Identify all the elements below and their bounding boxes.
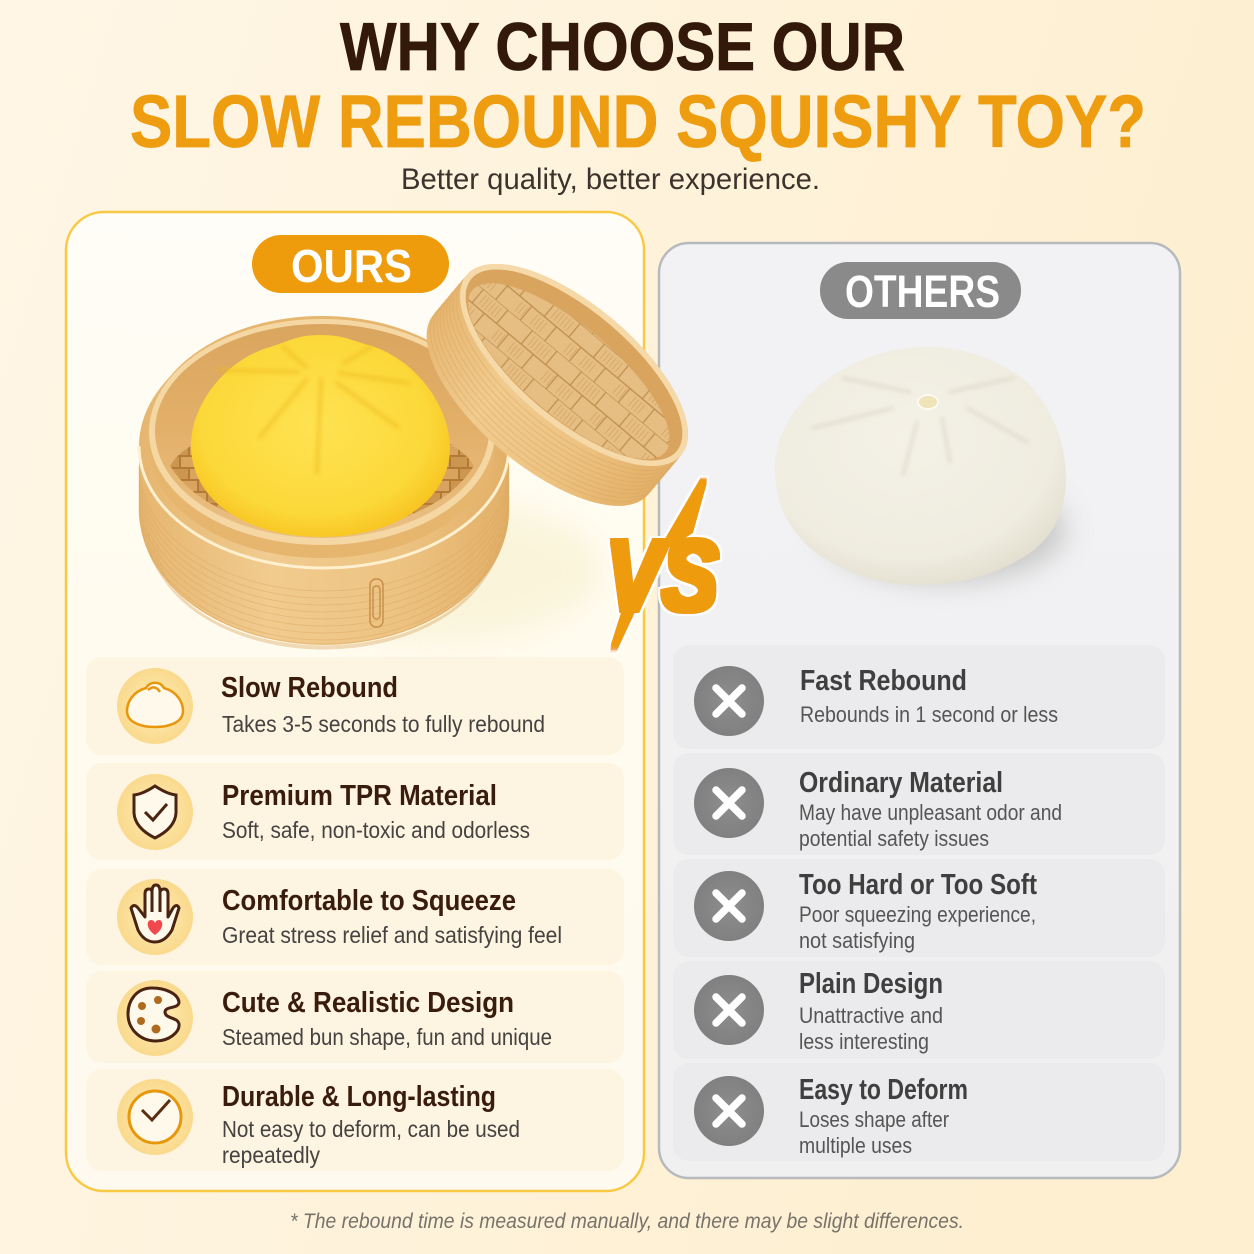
other row: plain design: Unattractive and (799, 1003, 943, 1028)
other row: ordinary material: potential safety issues (799, 826, 989, 851)
other row: ordinary material: May have unpleasant odor and (799, 800, 1062, 825)
feature row: design: Steamed bun shape, fun and unique (222, 1024, 552, 1050)
other row: easy to deform: Loses shape after (799, 1107, 949, 1132)
feature row: comfortable: Great stress relief and satisfying feel (222, 922, 562, 948)
feature row: premium material (86, 763, 624, 860)
feature row: design (86, 971, 624, 1063)
other row: fast rebound (673, 645, 1165, 749)
other row: too hard or soft: Poor squeezing experience, (799, 902, 1036, 927)
feature row: slow rebound: Slow Rebound (221, 672, 398, 704)
others badge: OTHERS (845, 266, 1000, 317)
other row: ordinary material (673, 753, 1165, 855)
feature row: design: Cute & Realistic Design (222, 987, 514, 1019)
ours badge: OURS (291, 240, 412, 292)
feature row: premium material: Soft, safe, non-toxic and odorless (222, 817, 530, 843)
title: WHY CHOOSE OUR (340, 9, 905, 85)
feature row: slow rebound (86, 657, 624, 755)
steamer clip (370, 579, 383, 627)
vs mark: VS (606, 520, 718, 632)
product photo: bamboo steamer with yellow bun (139, 316, 600, 649)
ours badge (252, 235, 449, 293)
feature row: durable (86, 1069, 624, 1171)
panel: ours (66, 212, 644, 1191)
feature row: comfortable: Comfortable to Squeeze (222, 885, 516, 917)
feature row: slow rebound: Takes 3-5 seconds to fully rebound (222, 711, 545, 737)
other row: easy to deform (673, 1063, 1165, 1161)
product photo: white bun (775, 347, 1066, 585)
feature row: durable: Not easy to deform, can be used (222, 1116, 520, 1142)
other row: too hard or soft: Too Hard or Too Soft (799, 869, 1037, 901)
other row: too hard or soft: not satisfying (799, 928, 915, 953)
feature row: durable: repeatedly (222, 1142, 320, 1168)
other row: fast rebound: Fast Rebound (800, 665, 967, 697)
other row: easy to deform: Easy to Deform (799, 1074, 968, 1106)
feature row: durable: Durable & Long-lasting (222, 1081, 496, 1113)
product photo: bamboo lid (426, 264, 688, 506)
other row: plain design: less interesting (799, 1029, 929, 1054)
feature row: comfortable (86, 869, 624, 965)
subtitle: Better quality, better experience. (401, 163, 820, 196)
other row: plain design (673, 961, 1165, 1059)
panel: others (659, 243, 1180, 1178)
feature row: premium material: Premium TPR Material (222, 780, 497, 812)
other row: fast rebound: Rebounds in 1 second or less (800, 702, 1058, 727)
other row: easy to deform: multiple uses (799, 1133, 912, 1158)
other row: too hard or soft (673, 859, 1165, 957)
other row: ordinary material: Ordinary Material (799, 767, 1003, 799)
footnote: * The rebound time is measured manually, and there may be slight differences. (290, 1210, 964, 1233)
title (130, 9, 1146, 163)
vs mark (606, 480, 718, 650)
other row: plain design: Plain Design (799, 968, 943, 1000)
